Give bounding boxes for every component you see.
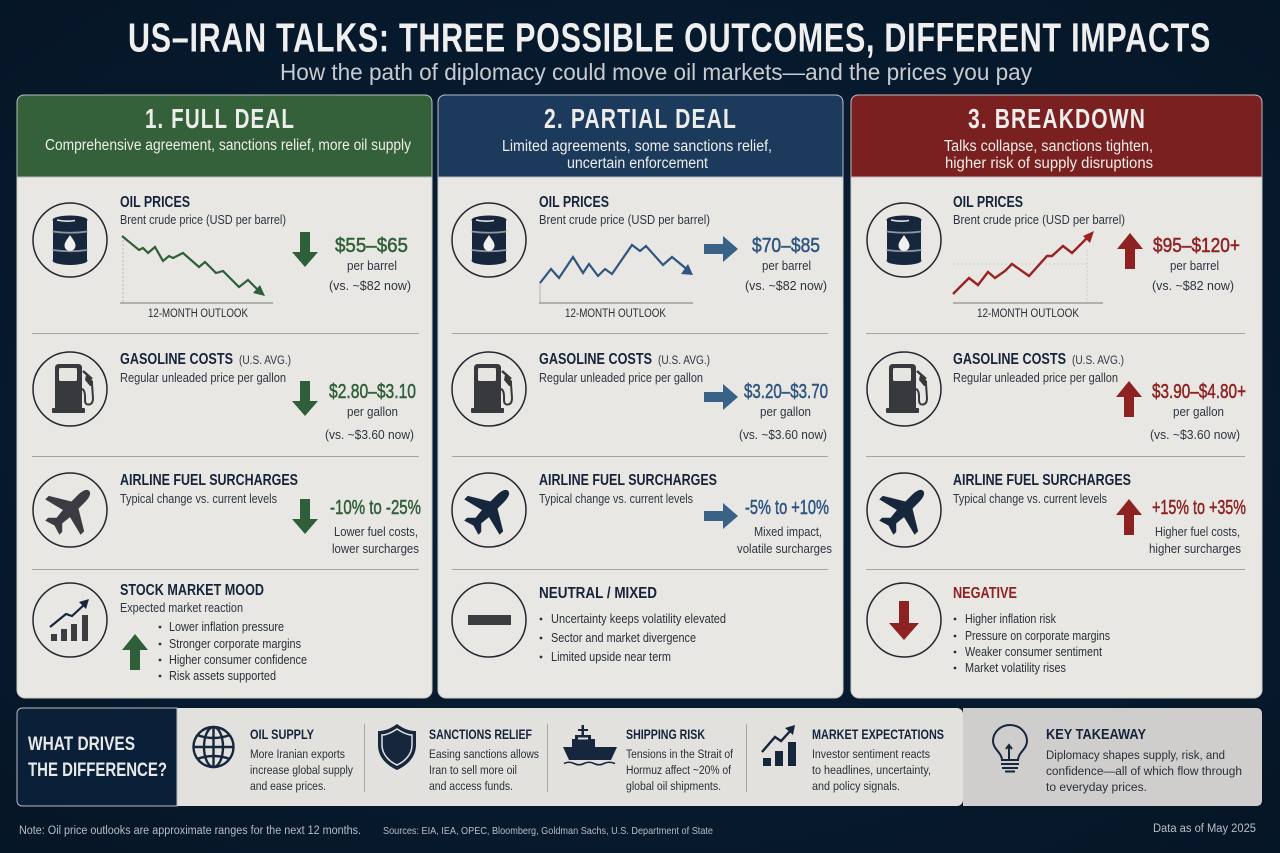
negative row [867, 583, 1110, 675]
airline row: Typical change vs. current levels [120, 492, 277, 506]
gasoline row: GASOLINE COSTS [539, 351, 652, 368]
panel: key takeaway [963, 708, 1262, 806]
driver: shipping risk: Tensions in the Strait of [626, 747, 734, 761]
line chart: volatile [539, 245, 693, 320]
driver: oil supply: More Iranian exports [250, 747, 345, 761]
oil prices row: $55–$65 [335, 235, 408, 257]
airline row: Mixed impact, [754, 524, 822, 539]
oil prices row [33, 194, 411, 320]
panel: breakdown [851, 95, 1262, 698]
header: full deal [17, 95, 432, 177]
gasoline row [867, 351, 1246, 442]
gasoline row: (vs. ~$3.60 now) [325, 427, 414, 442]
driver: market expectations: Investor sentiment reacts [812, 747, 930, 761]
airline row: Typical change vs. current levels [539, 492, 693, 506]
line chart: volatile: 12-MONTH OUTLOOK [565, 308, 666, 320]
driver: market expectations: MARKET EXPECTATIONS [812, 727, 944, 742]
driver: sanctions relief [378, 724, 539, 793]
driver: sanctions relief: SANCTIONS RELIEF [429, 727, 532, 742]
airline row [452, 472, 832, 556]
icon: shield [378, 724, 416, 770]
driver: sanctions relief: Easing sanctions allows [429, 747, 539, 761]
driver: shipping risk: Hormuz affect ~20% of [626, 763, 732, 777]
negative row: Pressure on corporate margins [965, 629, 1110, 643]
panel: partial deal [438, 95, 843, 698]
gasoline row: (vs. ~$3.60 now) [1150, 427, 1240, 442]
panel: key takeaway: to everyday prices. [1046, 780, 1147, 794]
driver: oil supply: and ease prices. [250, 779, 326, 793]
stock market row [33, 582, 307, 683]
header: breakdown: higher risk of supply disruptions [945, 155, 1153, 172]
oil prices row: (vs. ~$82 now) [745, 278, 827, 293]
airline row: Lower fuel costs, [334, 524, 418, 539]
negative row: NEGATIVE [953, 585, 1017, 602]
gasoline row: per gallon [347, 404, 398, 419]
header: partial deal [438, 95, 843, 177]
icon: ship [563, 725, 617, 765]
panel: what drives the difference [17, 708, 963, 806]
stock market row: Higher consumer confidence [169, 653, 307, 667]
stock market row: STOCK MARKET MOOD [120, 582, 264, 599]
driver: market expectations [762, 725, 944, 793]
oil prices row: per barrel [762, 258, 811, 273]
airline row [867, 472, 1246, 556]
oil prices row: $95–$120+ [1153, 235, 1240, 257]
header: partial deal: 2. PARTIAL DEAL [544, 103, 737, 134]
header: full deal: 1. FULL DEAL [145, 103, 295, 134]
oil prices row: Brent crude price (USD per barrel) [120, 213, 286, 227]
gasoline row: $2.80–$3.10 [329, 381, 416, 403]
gasoline row: GASOLINE COSTS [953, 351, 1066, 368]
stock market row: Lower inflation pressure [169, 620, 284, 634]
oil prices row: (vs. ~$82 now) [1152, 278, 1234, 293]
oil prices row: $70–$85 [752, 235, 820, 257]
oil prices row: Brent crude price (USD per barrel) [539, 213, 710, 227]
footnote: Note: Oil price outlooks are approximate ranges for the next 12 months. [19, 825, 361, 837]
airline row: AIRLINE FUEL SURCHARGES [120, 472, 298, 489]
header: partial deal: Limited agreements, some sanctions relief, [502, 138, 772, 155]
driver: shipping risk: SHIPPING RISK [626, 727, 705, 742]
line chart: rising [953, 231, 1103, 320]
driver: sanctions relief: Iran to sell more oil [429, 763, 517, 777]
panel: key takeaway: KEY TAKEAWAY [1046, 726, 1146, 743]
airline row: -5% to +10% [745, 497, 829, 519]
gasoline row: $3.20–$3.70 [744, 381, 828, 403]
driver: shipping risk [563, 725, 734, 793]
driver: shipping risk: global oil shipments. [626, 779, 721, 793]
neutral row: Sector and market divergence [551, 631, 696, 645]
header: breakdown: Talks collapse, sanctions tighten, [944, 138, 1153, 155]
driver: market expectations: and policy signals. [812, 779, 900, 793]
stock market row: Risk assets supported [169, 669, 276, 683]
neutral row: Limited upside near term [551, 650, 671, 664]
gasoline row: Regular unleaded price per gallon [120, 371, 286, 385]
airline row: AIRLINE FUEL SURCHARGES [539, 472, 717, 489]
icon: globe [194, 727, 234, 767]
gasoline row: GASOLINE COSTS [120, 351, 233, 368]
subtitle: How the path of diplomacy could move oil markets—and the prices you pay [280, 59, 1032, 85]
airline row: +15% to +35% [1152, 497, 1246, 519]
panel: key takeaway: confidence—all of which flow through [1046, 764, 1242, 778]
stock market row: Expected market reaction [120, 601, 243, 615]
sources: Sources: EIA, IEA, OPEC, Bloomberg, Goldman Sachs, U.S. Department of State [383, 825, 713, 837]
header: breakdown [851, 95, 1262, 177]
gasoline row: Regular unleaded price per gallon [953, 371, 1118, 385]
driver: oil supply [194, 727, 354, 793]
neutral row [452, 583, 726, 664]
line chart: falling: 12-MONTH OUTLOOK [148, 308, 248, 320]
oil prices row: per barrel [347, 258, 397, 273]
gasoline row: Regular unleaded price per gallon [539, 371, 703, 385]
neutral row: Uncertainty keeps volatility elevated [551, 612, 726, 626]
line chart: rising: 12-MONTH OUTLOOK [977, 308, 1079, 320]
oil prices row [867, 194, 1240, 320]
heading box [17, 708, 177, 806]
driver: oil supply: OIL SUPPLY [250, 727, 314, 742]
gasoline row [452, 351, 828, 442]
negative row: Higher inflation risk [965, 612, 1057, 626]
airline row: higher surcharges [1149, 541, 1241, 556]
icon: market chart [762, 725, 796, 766]
oil prices row: per barrel [1170, 258, 1219, 273]
airline row: Typical change vs. current levels [953, 492, 1107, 506]
neutral row: NEUTRAL / MIXED [539, 585, 657, 602]
driver: market expectations: to headlines, uncertainty, [812, 763, 931, 777]
negative row: Weaker consumer sentiment [965, 645, 1102, 659]
oil prices row: OIL PRICES [120, 194, 190, 211]
gasoline row: per gallon [1173, 404, 1224, 419]
gasoline row [33, 351, 416, 442]
icon: rising chart [50, 599, 89, 641]
oil prices row: OIL PRICES [539, 194, 609, 211]
data date: Data as of May 2025 [1153, 823, 1256, 835]
stock market row: Stronger corporate margins [169, 637, 301, 651]
gasoline row: (U.S. AVG.) [1072, 355, 1124, 367]
airline row: Higher fuel costs, [1155, 524, 1240, 539]
gasoline row: $3.90–$4.80+ [1152, 381, 1246, 403]
airline row: volatile surcharges [737, 541, 832, 556]
gasoline row: (U.S. AVG.) [658, 355, 710, 367]
oil prices row: (vs. ~$82 now) [329, 278, 411, 293]
driver: sanctions relief: and access funds. [429, 779, 513, 793]
airline row: AIRLINE FUEL SURCHARGES [953, 472, 1131, 489]
gasoline row: (U.S. AVG.) [239, 355, 291, 367]
oil prices row: OIL PRICES [953, 194, 1023, 211]
panel: full deal [17, 95, 432, 698]
airline row: lower surcharges [332, 541, 419, 556]
negative row: Market volatility rises [965, 661, 1066, 675]
icon: light bulb [993, 725, 1027, 772]
gasoline row: per gallon [760, 404, 811, 419]
line chart: falling [120, 236, 273, 320]
heading box: THE DIFFERENCE? [28, 760, 167, 781]
airline row: -10% to -25% [330, 497, 421, 519]
oil prices row [452, 194, 827, 320]
panel: key takeaway: Diplomacy shapes supply, risk, and [1046, 748, 1225, 762]
header: breakdown: 3. BREAKDOWN [968, 103, 1146, 134]
gasoline row: (vs. ~$3.60 now) [739, 427, 827, 442]
oil prices row: Brent crude price (USD per barrel) [953, 213, 1125, 227]
heading box: WHAT DRIVES [28, 734, 135, 755]
airline row [33, 472, 421, 556]
header: full deal: Comprehensive agreement, sanctions relief, more oil supply [45, 137, 411, 154]
header: partial deal: uncertain enforcement [567, 155, 709, 172]
driver: oil supply: increase global supply [250, 763, 354, 777]
